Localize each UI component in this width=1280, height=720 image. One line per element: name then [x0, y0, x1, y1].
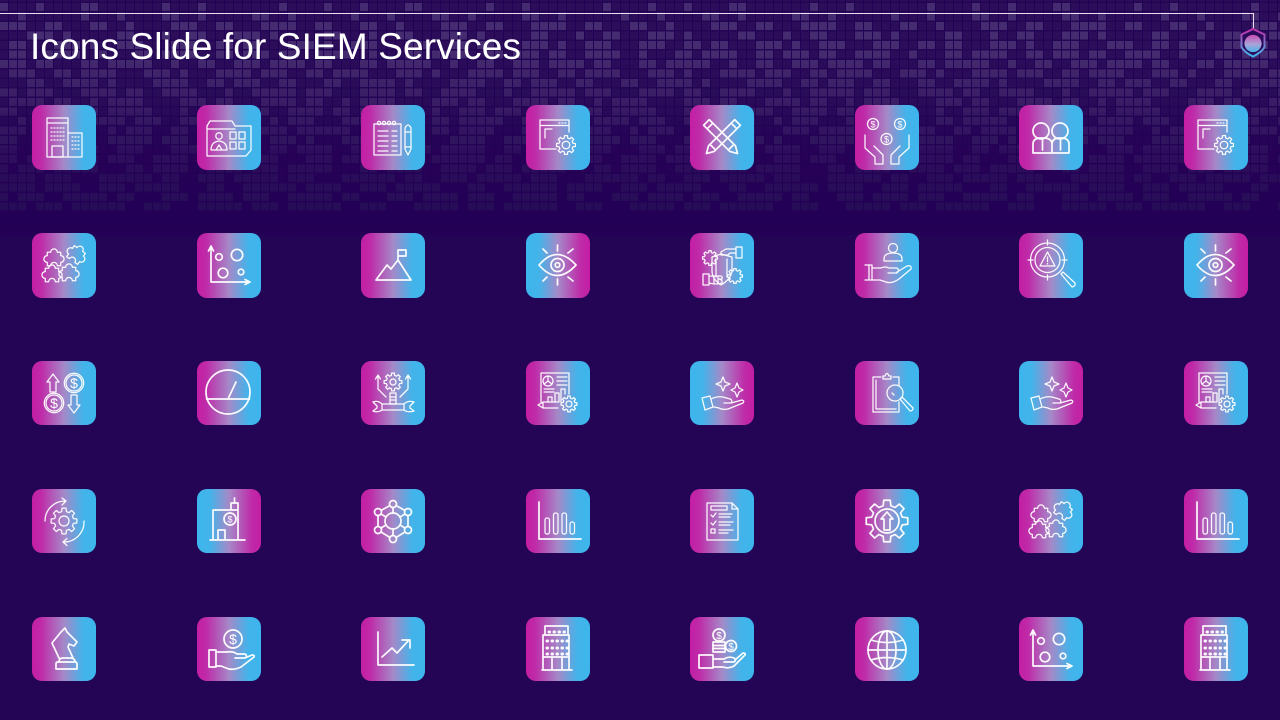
- icon tile: hand with sparkles: [1019, 361, 1083, 425]
- icon tile: office tower: [1184, 617, 1248, 681]
- icon tile: hand with dollar coin: [197, 617, 261, 681]
- icon tile: scatter plot: [197, 233, 261, 298]
- icon tile: dollars up and down: $: [50, 395, 58, 411]
- icon tile: office buildings: [32, 105, 96, 170]
- shield badge: [1242, 29, 1264, 56]
- top connector line: [0, 14, 1254, 29]
- icon tile: scatter plot: [1019, 617, 1083, 681]
- icon tile: globe: [855, 617, 919, 681]
- icon tile: two people: [1019, 105, 1083, 170]
- icon tile: report with pencil and gear: [526, 361, 590, 425]
- title: Icons Slide for SIEM Services: [30, 26, 521, 67]
- icon tile: dollars up and down: $: [70, 375, 78, 391]
- icon tile: notepad and pencil: [361, 105, 425, 170]
- icon tile: gear and wrenches: [361, 361, 425, 425]
- icon tile: browser window with gear: [526, 105, 590, 170]
- icon tile: hand with coin stack: $: [716, 631, 722, 642]
- icon tile: eye: [1184, 233, 1248, 298]
- icon tile: bar chart: [1184, 489, 1248, 553]
- icon tile: money in two hands: $: [884, 134, 889, 144]
- icon tile: money in two hands: $: [897, 120, 903, 130]
- icon tile: gauge: [197, 361, 261, 425]
- icon tile: magnifier with warning target: [1019, 233, 1083, 298]
- icon tile: clipboard and magnifier: [855, 361, 919, 425]
- icon tile: bar chart: [526, 489, 590, 553]
- icon tile: mountain with flag: [361, 233, 425, 298]
- icon tile: rising line chart: [361, 617, 425, 681]
- icon tile: report with pencil and gear: [1184, 361, 1248, 425]
- icon tile: money in two hands: $: [870, 120, 876, 130]
- icon tile: shield with handshake and gears: [690, 233, 754, 298]
- icon tile: hexagon network: [361, 489, 425, 553]
- icon tile: chess knight: [32, 617, 96, 681]
- icon tile: puzzle pieces: [32, 233, 96, 298]
- icon tile: eye: [526, 233, 590, 298]
- icon tile: hand holding person: [855, 233, 919, 298]
- icon tile: gear with up arrow: [855, 489, 919, 553]
- icon tile: office tower: [526, 617, 590, 681]
- background pixel pattern: [0, 0, 1280, 235]
- icon tile: puzzle pieces: [1019, 489, 1083, 553]
- icon tile: hand with coin stack: [690, 617, 754, 681]
- icon tile: checklist document: [690, 489, 754, 553]
- icon tile: money in two hands: [855, 105, 919, 170]
- icon tile: bank building with dollar: $: [227, 514, 233, 524]
- icon tile: browser window with gear: [1184, 105, 1248, 170]
- icon tile: gear with cycle arrows: [32, 489, 96, 553]
- icon tile: dollars up and down: [32, 361, 96, 425]
- icon tile: bank building with dollar: [197, 489, 261, 553]
- icon tile: hand with coin stack: $: [728, 642, 734, 653]
- icon tile: hand with sparkles: [690, 361, 754, 425]
- icon tile: crossed pencils: [690, 105, 754, 170]
- icon tile: folder with people: [197, 105, 261, 170]
- icon tile: hand with dollar coin: $: [229, 631, 237, 647]
